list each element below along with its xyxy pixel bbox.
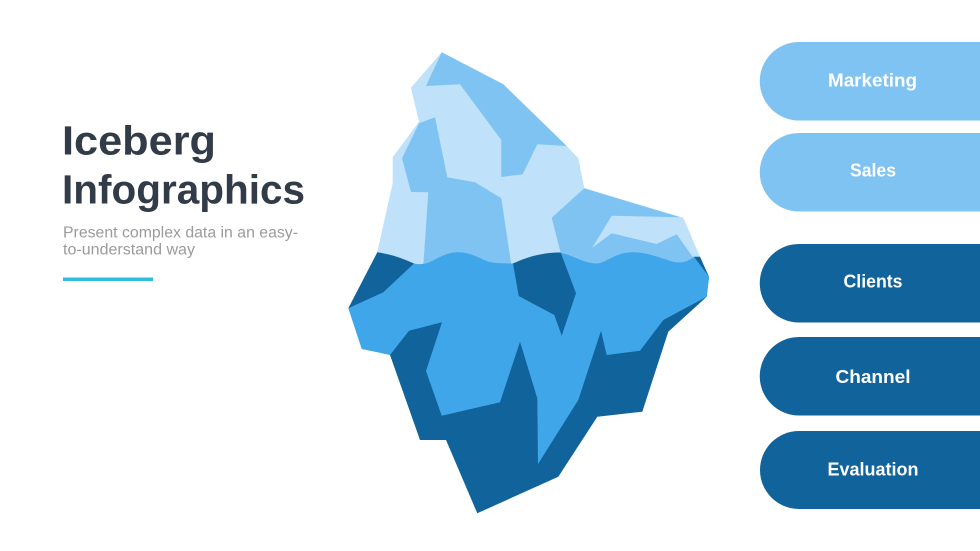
- iceberg tip: light base: [377, 52, 700, 270]
- submerged: dark base: [348, 252, 709, 513]
- button: Clients: [760, 244, 980, 322]
- title: Iceberg: [62, 118, 216, 164]
- title: Infographics: [62, 166, 305, 212]
- iceberg tip: upper facet: [426, 52, 567, 177]
- button: Sales: [760, 133, 980, 212]
- submerged: central dark island: [513, 252, 576, 336]
- subtitle text: to-understand way: [63, 242, 195, 258]
- button: Sales: Sales: [850, 161, 896, 181]
- iceberg tip: left facet: [402, 117, 512, 270]
- button: Channel: [760, 337, 980, 416]
- iceberg illustration: [348, 52, 709, 513]
- button: Marketing: Marketing: [828, 71, 917, 91]
- button: Channel: Channel: [836, 367, 910, 387]
- subtitle text: [63, 224, 298, 258]
- button: Clients: Clients: [844, 271, 902, 291]
- accent underline: [63, 278, 153, 281]
- submerged: bright facet: [348, 252, 709, 464]
- subtitle text: Present complex data in an easy-: [63, 224, 298, 242]
- button: Evaluation: [760, 431, 980, 509]
- iceberg tip: right facet: [552, 188, 697, 270]
- title: [62, 118, 305, 212]
- button: Evaluation: Evaluation: [828, 460, 918, 480]
- button: Marketing: [760, 42, 980, 120]
